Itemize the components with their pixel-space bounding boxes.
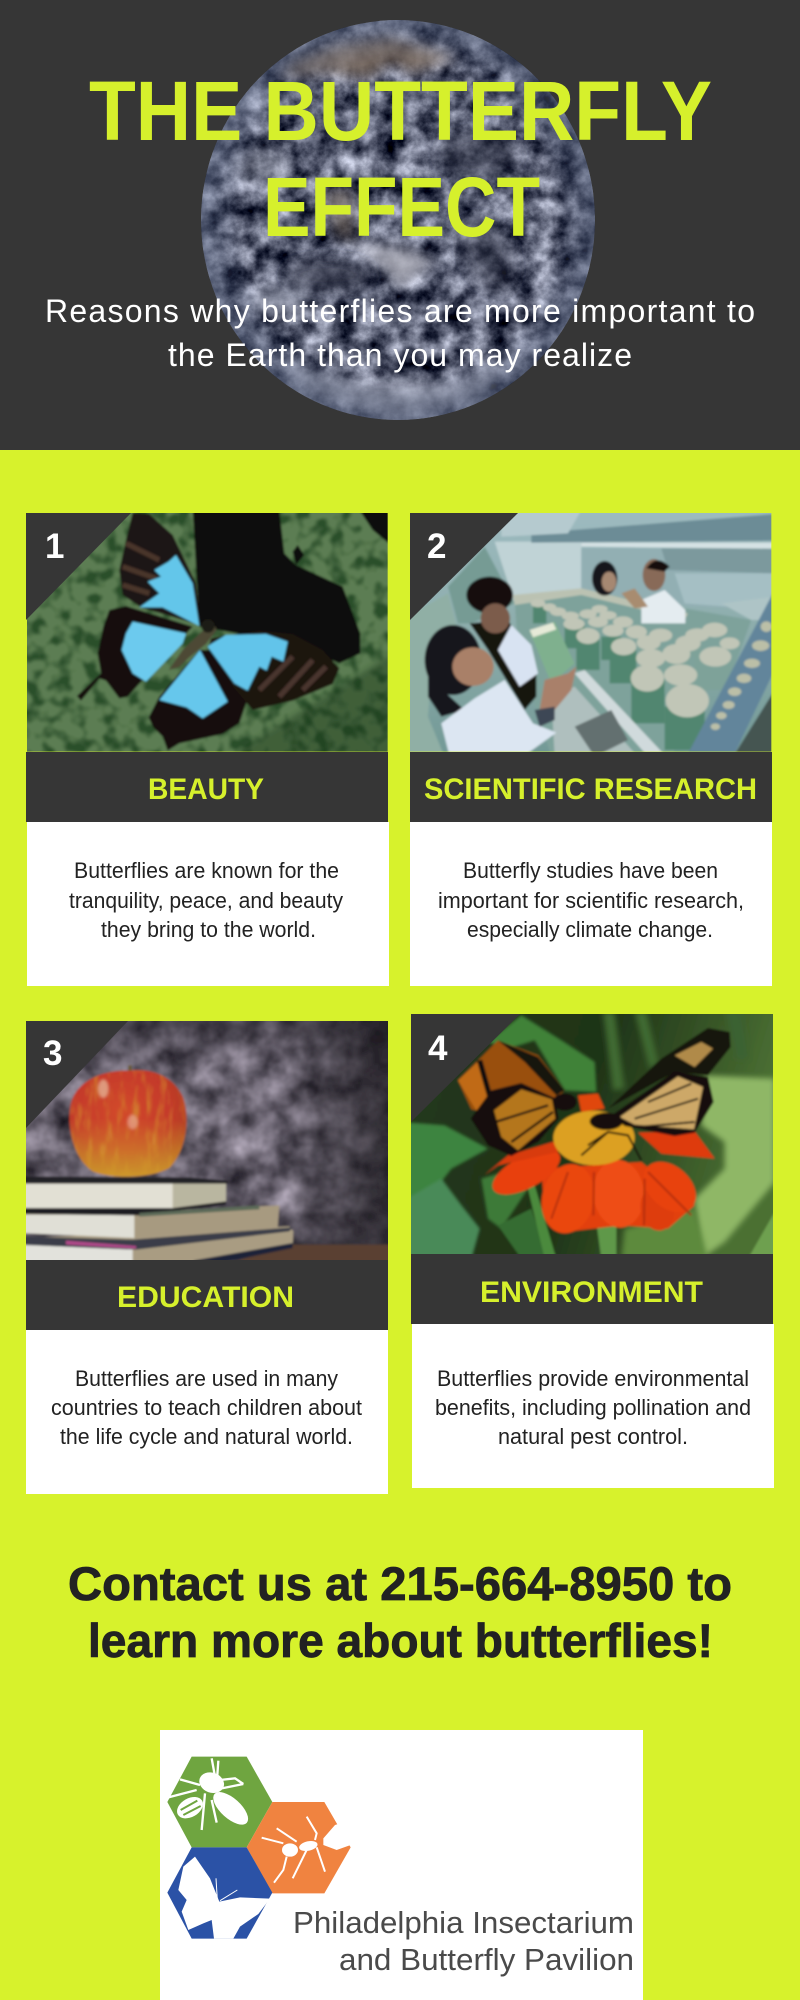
description card: [410, 822, 772, 986]
title band: [411, 1254, 773, 1324]
logo wordmark: and Butterfly Pavilion: [339, 1942, 634, 1977]
logo panel: [160, 1730, 643, 2000]
logo wordmark: Philadelphia Insectarium: [293, 1905, 634, 1940]
number corner: [26, 1021, 128, 1128]
description card: [412, 1324, 774, 1488]
description card: benefits, including pollination and: [435, 1395, 751, 1420]
number corner: [411, 1014, 520, 1122]
subtitle: [45, 293, 755, 373]
title band: ENVIRONMENT: [480, 1276, 703, 1309]
subtitle: Reasons why butterflies are more important to: [45, 293, 755, 329]
description card: Butterfly studies have been: [463, 858, 718, 883]
panel: education: [16, 1011, 399, 1494]
title: [89, 64, 712, 254]
number corner: [26, 513, 131, 620]
header panel: [0, 0, 800, 450]
photo: apple on books: [26, 1021, 388, 1260]
description card: [27, 822, 389, 986]
earth image: [201, 20, 595, 420]
hexagon: butterfly: [167, 1847, 272, 1939]
photo: blue butterfly on leaf: [27, 513, 388, 752]
title band: [410, 752, 772, 822]
description card: natural pest control.: [498, 1424, 688, 1449]
description card: the life cycle and natural world.: [60, 1424, 353, 1449]
panel: environment: [398, 1005, 781, 1488]
title: THE BUTTERFLY: [89, 64, 712, 158]
description card: Butterflies provide environmental: [437, 1366, 749, 1391]
title band: SCIENTIFIC RESEARCH: [424, 773, 757, 806]
number corner: 1: [45, 527, 64, 566]
title band: [26, 752, 388, 822]
title: EFFECT: [263, 160, 540, 254]
number corner: [410, 513, 518, 620]
description card: countries to teach children about: [51, 1395, 362, 1420]
logo hexagons with insects: [167, 1757, 351, 1939]
number corner: 3: [43, 1034, 62, 1073]
number corner: 4: [428, 1029, 448, 1068]
call to action: [68, 1557, 732, 1667]
call to action: Contact us at 215-664-8950 to: [68, 1557, 732, 1610]
hexagon: bee: [167, 1757, 272, 1847]
description card: tranquility, peace, and beauty: [69, 888, 343, 913]
description card: Butterflies are known for the: [74, 858, 339, 883]
description card: especially climate change.: [467, 917, 713, 942]
title band: EDUCATION: [117, 1281, 294, 1314]
photo: butterflies on orange flower: [411, 1014, 773, 1254]
photo: scientists in lab: [410, 513, 772, 752]
description card: [26, 1330, 388, 1494]
description card: Butterflies are used in many: [75, 1366, 338, 1391]
logo wordmark: [293, 1905, 634, 1977]
hexagon: ant: [247, 1802, 351, 1893]
panel: scientific research: [398, 503, 781, 986]
title band: [26, 1260, 388, 1330]
panel: beauty: [16, 503, 399, 986]
call to action: learn more about butterflies!: [88, 1614, 713, 1667]
number corner: 2: [427, 527, 446, 566]
description card: they bring to the world.: [101, 917, 316, 942]
description card: important for scientific research,: [438, 888, 744, 913]
subtitle: the Earth than you may realize: [168, 337, 632, 373]
title band: BEAUTY: [148, 773, 264, 806]
